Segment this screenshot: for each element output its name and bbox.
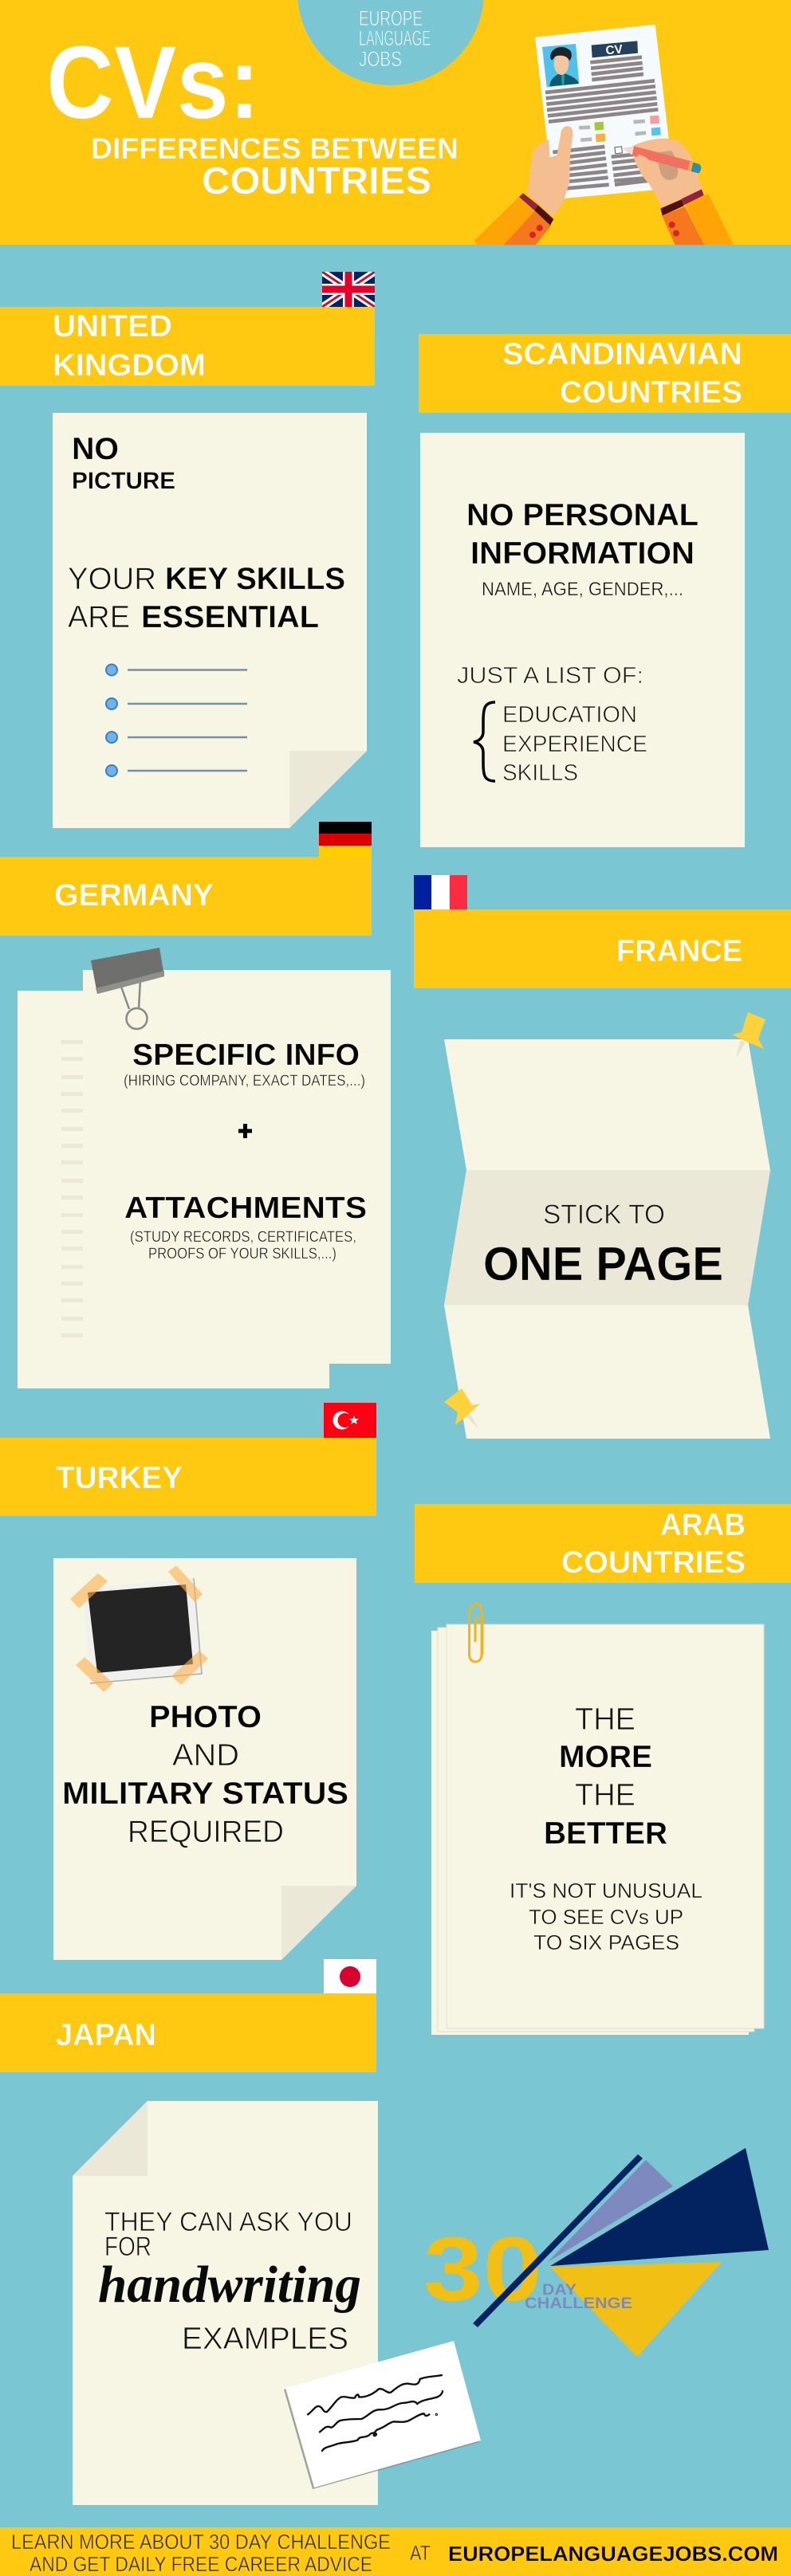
panel: Arab paper stack: BETTER: [544, 1816, 667, 1851]
panel: Japan note: EXAMPLES: [182, 2322, 348, 2356]
panel: Scandinavian note: [420, 433, 745, 847]
title: COUNTRIES: [202, 160, 431, 202]
banner: France: [414, 909, 791, 988]
flag: Japan: [324, 1959, 376, 1994]
panel: Germany note: [18, 948, 391, 1388]
title: DIFFERENCES BETWEEN: [91, 132, 458, 165]
logo: 30 day challenge: 30: [423, 2219, 542, 2320]
panel: Japan note: [73, 2101, 481, 2505]
panel: Japan note: FOR: [104, 2232, 152, 2262]
panel: Germany note: (STUDY RECORDS, CERTIFICATES,: [130, 1229, 356, 1246]
panel: Scandinavian note: SKILLS: [502, 760, 578, 786]
panel: United Kingdom note: ESSENTIAL: [141, 600, 319, 634]
banner: Scandinavian Countries: SCANDINAVIAN: [502, 337, 742, 371]
plus sign: [238, 1124, 252, 1138]
panel: Germany note: SPECIFIC INFO: [132, 1039, 360, 1072]
footer: AT: [410, 2541, 431, 2565]
panel: Turkey note: MILITARY STATUS: [62, 1777, 348, 1811]
illustration: hands holding a CV: CV: [605, 42, 624, 57]
title: [46, 24, 458, 202]
panel: Arab paper stack: MORE: [559, 1740, 652, 1774]
panel: Scandinavian note: EDUCATION: [502, 702, 637, 728]
banner: Arab Countries: COUNTRIES: [561, 1545, 746, 1580]
panel: Japan note: THEY CAN ASK YOU: [104, 2207, 352, 2237]
header banner: [0, 0, 791, 245]
panel: France folded page: STICK TO: [543, 1200, 665, 1230]
panel: France folded page: ONE PAGE: [483, 1238, 723, 1290]
banner: Japan: [0, 1993, 376, 2072]
banner: Turkey: [0, 1438, 376, 1516]
banner: Scandinavian Countries: COUNTRIES: [560, 375, 742, 410]
logo: 30 day challenge: [423, 2148, 769, 2357]
panel: Scandinavian note: EXPERIENCE: [502, 732, 647, 757]
banner: United Kingdom: UNITED: [53, 309, 172, 344]
icon: taped photo: [70, 1565, 208, 1692]
panel: Scandinavian note: NAME, AGE, GENDER,...: [482, 579, 683, 600]
brace: [474, 702, 495, 781]
panel: United Kingdom note: YOUR: [68, 562, 156, 596]
logo badge: JOBS: [359, 47, 402, 71]
banner: Arab Countries: ARAB: [660, 1508, 746, 1542]
logo badge: [297, 0, 484, 85]
icon: pin top: [732, 1012, 765, 1058]
panel: Germany note: (HIRING COMPANY, EXACT DATES,...): [124, 1073, 365, 1090]
panel: Arab paper stack: TO SIX PAGES: [533, 1930, 679, 1954]
banner: Turkey: TURKEY: [56, 1461, 183, 1495]
panel: United Kingdom note: PICTURE: [72, 468, 175, 494]
panel: United Kingdom note: [53, 413, 367, 828]
panel: United Kingdom note: NO: [72, 432, 119, 466]
banner: Japan: JAPAN: [56, 2018, 156, 2052]
banner: Scandinavian Countries: [419, 334, 791, 413]
footer: AND GET DAILY FREE CAREER ADVICE: [30, 2552, 372, 2576]
panel: Arab paper stack: THE: [575, 1778, 636, 1812]
banner: Germany: [0, 857, 372, 936]
flag: France: [414, 875, 467, 910]
panel: France folded page: [444, 1012, 770, 1439]
panel: Arab paper stack: [431, 1604, 764, 2035]
logo: 30 day challenge: CHALLENGE: [525, 2295, 632, 2312]
footer: LEARN MORE ABOUT 30 DAY CHALLENGE: [11, 2530, 391, 2554]
panel: Arab paper stack: TO SEE CVs UP: [529, 1905, 683, 1929]
panel: Germany note: PROOFS OF YOUR SKILLS,...): [148, 1246, 336, 1262]
banner: Germany: GERMANY: [54, 878, 214, 913]
panel: Japan note: handwriting: [98, 2256, 361, 2314]
logo badge: LANGUAGE: [359, 26, 431, 50]
panel: Turkey note: PHOTO: [149, 1700, 262, 1734]
logo: 30 day challenge: DAY: [542, 2282, 577, 2299]
illustration: hands holding a CV: [474, 25, 734, 245]
icon: pin bottom: [444, 1388, 480, 1430]
title: CVs:: [46, 24, 260, 140]
footer: EUROPELANGUAGEJOBS.COM: [448, 2542, 778, 2566]
banner: Arab Countries: [415, 1504, 791, 1583]
handwriting card: [284, 2341, 481, 2489]
flag: Turkey: [324, 1403, 376, 1438]
banner: United Kingdom: [0, 307, 375, 386]
panel: Germany note: ATTACHMENTS: [124, 1192, 367, 1225]
panel: Scandinavian note: JUST A LIST OF:: [457, 663, 643, 689]
panel: Turkey note: [53, 1558, 356, 1960]
panel: Scandinavian note: INFORMATION: [470, 536, 695, 571]
panel: Scandinavian note: NO PERSONAL: [466, 498, 699, 532]
banner: United Kingdom: KINGDOM: [53, 348, 206, 383]
flag: Germany: [319, 822, 372, 857]
bullet list: [106, 665, 247, 776]
panel: United Kingdom note: ARE: [68, 600, 130, 634]
footer: [0, 2527, 791, 2576]
panel: Arab paper stack: THE: [575, 1702, 636, 1737]
panel: United Kingdom note: KEY SKILLS: [165, 562, 345, 596]
icon: paper clip: [469, 1604, 482, 1662]
panel: Arab paper stack: IT'S NOT UNUSUAL: [510, 1879, 702, 1903]
icon: binder clip: [91, 948, 164, 1029]
panel: Turkey note: REQUIRED: [128, 1815, 284, 1849]
logo badge: EUROPE: [359, 6, 423, 30]
banner: France: FRANCE: [616, 934, 742, 968]
panel: Turkey note: AND: [172, 1738, 239, 1773]
flag: United Kingdom: [322, 272, 375, 307]
